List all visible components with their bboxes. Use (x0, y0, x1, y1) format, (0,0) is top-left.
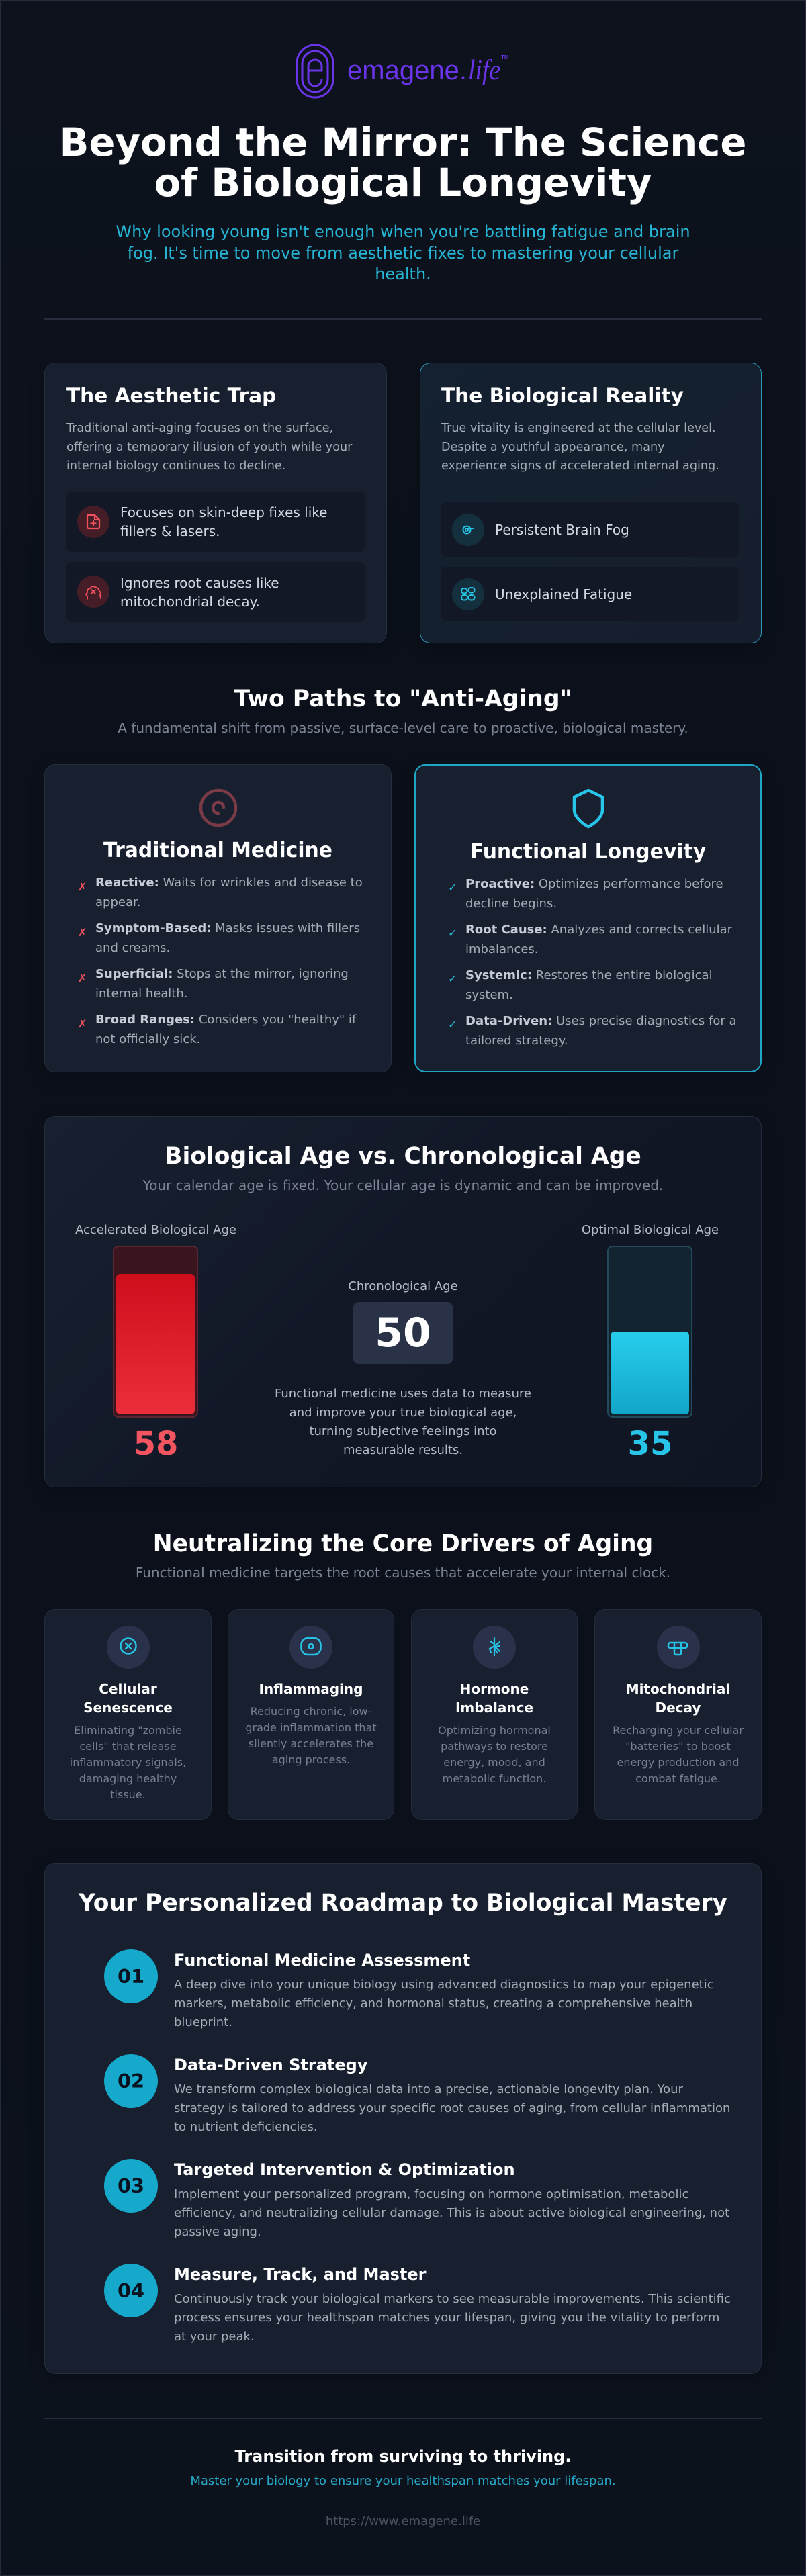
broad ranges: Broad Ranges: Considers you "healthy" if (95, 1013, 356, 1027)
step heading: Data-Driven Strategy (174, 2056, 367, 2074)
description: Eliminating "zombie (74, 1724, 182, 1737)
description: Recharging your cellular (613, 1724, 744, 1737)
card: hormone imbalance (411, 1609, 578, 1820)
step text (174, 2292, 731, 2344)
item: fatigue (441, 567, 739, 621)
text: Unexplained Fatigue (495, 586, 632, 602)
number badge (104, 2054, 158, 2108)
subtitle: Why looking young isn't enough when you're battling fatigue and brain (116, 222, 690, 241)
check marks: ✓ (448, 927, 457, 939)
logo: emagene.life: emagene. (347, 56, 467, 85)
panel: traditional medicine (44, 764, 392, 1072)
cross marks: ✗ (78, 926, 87, 939)
footer url: https://www.emagene.life (326, 2514, 480, 2528)
heading: Hormone (460, 1681, 529, 1697)
icon: linked cells (452, 578, 484, 610)
step text: Implement your personalized program, focusing on hormone optimisation, metabolic (174, 2187, 688, 2201)
description: True vitality is engineered at the cellular level. (441, 422, 716, 435)
description: damaging healthy (79, 1772, 177, 1785)
step text: passive aging. (174, 2225, 261, 2239)
heading: two paths: Two Paths to "Anti-Aging" (234, 686, 572, 712)
heading: Traditional Medicine (103, 839, 332, 862)
heading: Cellular (99, 1681, 157, 1697)
description: grade inflammation that (245, 1721, 377, 1734)
description (438, 1724, 551, 1785)
systemic: Systemic: Restores the entire biological (465, 968, 713, 982)
number badge (104, 2264, 158, 2317)
explanation: and improve your true biological age, (289, 1406, 517, 1420)
step text (174, 2187, 729, 2239)
description: experience signs of accelerated internal aging. (441, 459, 719, 473)
icon: cell with cross (77, 576, 109, 608)
cross marks (78, 880, 87, 1030)
value box: 50 (353, 1302, 453, 1364)
heading: Imbalance (455, 1700, 533, 1716)
superficial (95, 967, 349, 1001)
number badge: 02 (118, 2070, 144, 2092)
icon: document plus (77, 506, 109, 538)
text: Focuses on skin-deep fixes like (120, 504, 327, 520)
icon: target (199, 788, 238, 827)
proactive: decline begins. (465, 896, 557, 911)
heading: The Biological Reality (441, 384, 684, 407)
list item (78, 876, 363, 1046)
description: metabolic function. (443, 1772, 546, 1785)
symptom-based (95, 921, 360, 955)
item: skin-deep fixes (66, 492, 365, 552)
symptom-based: Symptom-Based: Masks issues with fillers (95, 921, 360, 935)
number badge: 01 (118, 1965, 144, 1988)
description: cells" that release (79, 1740, 177, 1753)
proactive: Proactive: Optimizes performance before (465, 877, 723, 891)
description: inflammatory signals, (70, 1756, 186, 1769)
check marks: ✓ (448, 881, 457, 894)
description: internal biology continues to decline. (66, 459, 285, 473)
title: Beyond the Mirror: The Science (60, 120, 746, 165)
description (66, 422, 352, 473)
panel: biological vs chronological age (44, 1116, 762, 1487)
root cause: Root Cause: Analyzes and corrects cellular (465, 923, 732, 937)
card: mitochondrial decay (594, 1609, 762, 1820)
section subtitle: A fundamental shift from passive, surface-level care to proactive, biological mastery. (118, 720, 688, 736)
bar: optimal biological age (607, 1246, 692, 1418)
step text: strategy is tailored to address your specific root causes of aging, from cellular inflammation (174, 2101, 730, 2115)
step 2 (104, 2054, 730, 2134)
description: energy production and (617, 1756, 739, 1769)
heading: Functional Longevity (470, 840, 706, 864)
proactive (465, 877, 723, 911)
description: Traditional anti-aging focuses on the surface, (66, 422, 333, 435)
icon: shield (572, 788, 604, 829)
systemic (465, 968, 713, 1002)
root cause (465, 923, 732, 956)
step heading: Targeted Intervention & Optimization (174, 2160, 515, 2179)
description (245, 1705, 377, 1766)
bar fill (116, 1274, 195, 1414)
heading: Mitochondrial (626, 1681, 730, 1697)
heading: Decay (656, 1700, 701, 1716)
explanation: measurable results. (343, 1443, 463, 1457)
heading: Your Personalized Roadmap to Biological Mastery (79, 1890, 727, 1917)
superficial: Superficial: Stops at the mirror, ignoring (95, 967, 349, 981)
heading: Senescence (83, 1700, 173, 1716)
step 1 (104, 1949, 714, 2029)
step text: blueprint. (174, 2015, 232, 2029)
value box: 50: 50 (375, 1309, 431, 1356)
reactive: Reactive: Waits for wrinkles and disease to (95, 876, 363, 890)
cross marks: ✗ (78, 972, 87, 984)
step heading: Functional Medicine Assessment (174, 1951, 470, 1970)
label: optimal: Optimal Biological Age (582, 1223, 719, 1237)
text: Persistent Brain Fog (495, 522, 629, 538)
subtitle (116, 222, 690, 283)
bar: accelerated biological age (113, 1246, 198, 1418)
step text (174, 2082, 730, 2134)
value: 58: 58 (134, 1425, 178, 1463)
step text: A deep dive into your unique biology using advanced diagnostics to map your epigenetic (174, 1978, 714, 1992)
text: Ignores root causes like (120, 575, 279, 591)
label: chronological: Chronological Age (348, 1279, 458, 1293)
text: mitochondrial decay. (120, 594, 260, 610)
description: energy, mood, and (443, 1756, 545, 1769)
heading: Biological Age vs. Chronological Age (165, 1143, 641, 1170)
icon: ring (289, 1626, 332, 1669)
number badge (104, 2159, 158, 2213)
text (120, 504, 327, 539)
explanation (275, 1387, 531, 1457)
logo: emagene.life: TM (501, 54, 509, 60)
description (70, 1724, 186, 1801)
description: "batteries" to boost (625, 1740, 731, 1753)
list (448, 877, 737, 1048)
bar fill (611, 1332, 689, 1414)
step heading: Measure, Track, and Master (174, 2265, 427, 2284)
explanation: turning subjective feelings into (309, 1424, 497, 1438)
description: Reducing chronic, low- (251, 1705, 371, 1718)
step text: efficiency, and neutralizing cellular damage. This is about active biological engineering, not (174, 2206, 729, 2220)
step text: We transform complex biological data into a precise, actionable longevity plan. Your (174, 2082, 683, 2097)
reactive: appear. (95, 894, 140, 909)
step 3 (104, 2159, 729, 2239)
section subtitle: Functional medicine targets the root causes that accelerate your internal clock. (136, 1565, 670, 1581)
panel: roadmap (44, 1863, 762, 2374)
reactive (95, 876, 363, 909)
description: tissue. (110, 1788, 146, 1801)
description (441, 422, 719, 473)
heading (455, 1681, 533, 1716)
step text (174, 1978, 714, 2029)
description: silently accelerates the (249, 1737, 373, 1750)
subtitle: Your calendar age is fixed. Your cellular age is dynamic and can be improved. (143, 1177, 663, 1193)
root cause: imbalances. (465, 941, 539, 956)
description: offering a temporary illusion of youth while your (66, 441, 352, 454)
number badge: 04 (118, 2279, 144, 2302)
icon: circled x (106, 1626, 149, 1669)
step text: process ensures your healthspan matches your lifespan, giving you the vitality to perform (174, 2311, 719, 2325)
step text: at your peak. (174, 2330, 255, 2344)
cross marks: ✗ (78, 1017, 87, 1030)
card: inflammaging (228, 1609, 394, 1820)
item: brain fog (441, 502, 739, 557)
value: 35: 35 (628, 1425, 672, 1463)
number badge (104, 1949, 158, 2003)
broad ranges (95, 1013, 357, 1046)
title: of Biological Longevity (154, 160, 652, 205)
icon: hormone burst (473, 1626, 516, 1669)
check marks (448, 881, 457, 1031)
data-driven: Data-Driven: Uses precise diagnostics for a (465, 1014, 737, 1028)
subtitle: fog. It's time to move from aesthetic fixes to mastering your cellular (128, 243, 678, 262)
superficial: internal health. (95, 986, 188, 1001)
step 4 (104, 2264, 731, 2344)
check marks: ✓ (448, 1018, 457, 1031)
title (60, 120, 746, 205)
symptom-based: and creams. (95, 940, 170, 955)
panel: the aesthetic trap (44, 363, 387, 643)
card: cellular senescence (44, 1609, 212, 1820)
heading: core drivers: Neutralizing the Core Drivers of Aging (153, 1530, 653, 1557)
systemic: system. (465, 987, 513, 1002)
description: combat fatigue. (635, 1772, 721, 1785)
heading: Inflammaging (259, 1681, 363, 1697)
description: pathways to restore (441, 1740, 548, 1753)
label: accelerated: Accelerated Biological Age (75, 1223, 236, 1237)
logo: emagene.life (296, 44, 509, 98)
footer tagline: Master your biology to ensure your healthspan matches your lifespan. (190, 2474, 616, 2488)
description: aging process. (272, 1753, 350, 1766)
step text: Continuously track your biological markers to see measurable improvements. This scientific (174, 2292, 731, 2306)
panel: functional longevity (414, 764, 762, 1072)
footer headline: Transition from surviving to thriving. (235, 2447, 571, 2466)
step text: markers, metabolic efficiency, and hormonal status, creating a comprehensive health (174, 1996, 692, 2011)
icon: spiral (452, 514, 484, 546)
data-driven: tailored strategy. (465, 1033, 568, 1048)
step text: to nutrient deficiencies. (174, 2120, 318, 2134)
description (613, 1724, 744, 1785)
panel: the biological reality (420, 363, 762, 643)
description: Despite a youthful appearance, many (441, 441, 665, 454)
text (120, 575, 279, 610)
cross marks: ✗ (78, 880, 87, 893)
icon: battery cap (657, 1626, 700, 1669)
heading (626, 1681, 730, 1716)
heading (83, 1681, 173, 1716)
description: Optimizing hormonal (438, 1724, 551, 1737)
subtitle: health. (375, 265, 431, 283)
data-driven (465, 1014, 737, 1048)
text: fillers & lasers. (120, 523, 220, 539)
broad ranges: not officially sick. (95, 1031, 200, 1046)
logo: emagene.life: life (468, 55, 500, 86)
item: root causes (66, 562, 365, 622)
explanation: Functional medicine uses data to measure (275, 1387, 531, 1401)
check marks: ✓ (448, 972, 457, 985)
number badge: 03 (118, 2174, 144, 2197)
heading: The Aesthetic Trap (66, 384, 276, 407)
